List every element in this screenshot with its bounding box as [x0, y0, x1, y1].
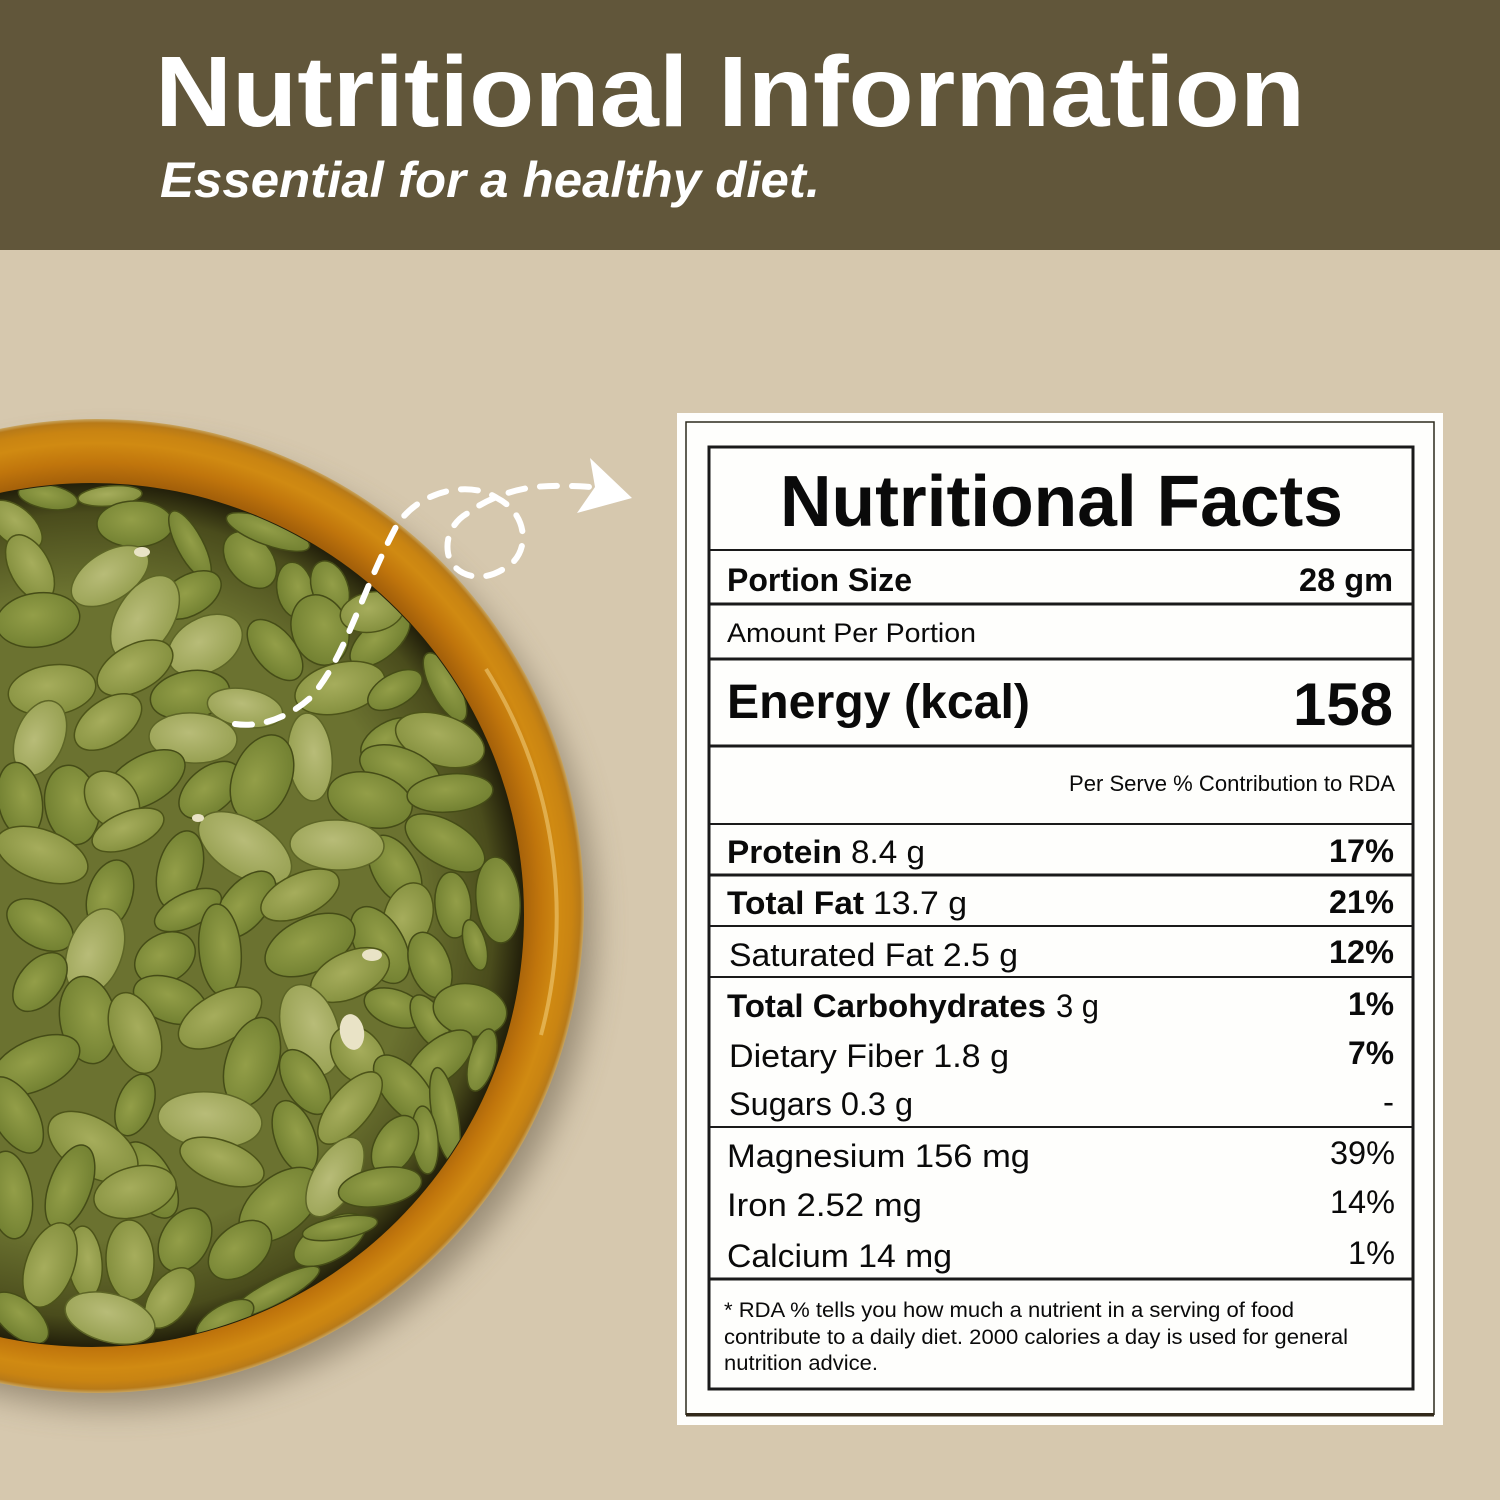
title: Nutritional Information — [155, 36, 1305, 148]
portion size row — [727, 562, 1393, 598]
table heading: Nutritional Facts — [780, 462, 1343, 542]
iron row: 14% — [1330, 1184, 1395, 1220]
sugars row: - — [1383, 1084, 1394, 1120]
nutrition facts card — [677, 413, 1443, 1425]
footnote: contribute to a daily diet. 2000 calories a day is used for general — [724, 1325, 1348, 1349]
footnote: nutrition advice. — [724, 1351, 878, 1375]
amount per portion: Amount Per Portion — [727, 618, 976, 648]
dashed arrow from bowl to label — [235, 458, 632, 725]
footnote: * RDA % tells you how much a nutrient in a serving of food — [724, 1298, 1294, 1322]
footnote — [724, 1298, 1348, 1375]
seeds — [0, 480, 524, 1354]
saturated fat row — [729, 934, 1394, 973]
calcium row — [727, 1235, 1395, 1274]
energy row: 158 — [1293, 671, 1393, 738]
subtitle: Essential for a healthy diet. — [160, 152, 820, 208]
sugars row — [729, 1084, 1394, 1122]
sugars row: Sugars 0.3 g — [729, 1086, 913, 1122]
portion size row: 28 gm — [1299, 562, 1393, 598]
portion size row: Portion Size — [727, 562, 912, 598]
total carbohydrates row: Total Carbohydrates — [727, 988, 1046, 1024]
calcium row: 1% — [1348, 1235, 1395, 1271]
total carbohydrates row: 3 g — [1056, 988, 1099, 1024]
skin chips on seeds — [134, 547, 382, 1052]
total fat row: 13.7 g — [873, 885, 967, 921]
total fat row: Total Fat — [727, 885, 864, 921]
saturated fat row: Saturated Fat 2.5 g — [729, 937, 1018, 973]
bowl of pumpkin seeds — [0, 419, 594, 1407]
facts table — [709, 447, 1413, 1389]
RDA header: Per Serve % Contribution to RDA — [1069, 771, 1395, 796]
calcium row: Calcium 14 mg — [727, 1238, 952, 1274]
bowl rim — [0, 419, 584, 1393]
saturated fat row: 12% — [1329, 934, 1394, 970]
energy row — [727, 671, 1393, 738]
magnesium row: 39% — [1330, 1135, 1395, 1171]
total carbohydrates row — [727, 986, 1394, 1024]
protein row — [727, 833, 1394, 870]
header banner — [0, 0, 1500, 250]
protein row: 17% — [1329, 833, 1394, 869]
dietary fiber row: 7% — [1348, 1035, 1394, 1071]
magnesium row — [727, 1135, 1395, 1174]
protein row: Protein — [727, 834, 842, 870]
iron row — [727, 1184, 1395, 1223]
total fat row — [727, 884, 1394, 921]
dietary fiber row: Dietary Fiber 1.8 g — [729, 1038, 1009, 1074]
protein row: 8.4 g — [851, 834, 925, 870]
magnesium row: Magnesium 156 mg — [727, 1138, 1030, 1174]
arrowhead — [577, 458, 632, 513]
iron row: Iron 2.52 mg — [727, 1187, 922, 1223]
total fat row: 21% — [1329, 884, 1394, 920]
dietary fiber row — [729, 1035, 1394, 1074]
energy row: Energy (kcal) — [727, 676, 1030, 729]
total carbohydrates row: 1% — [1348, 986, 1394, 1022]
card inner border — [686, 422, 1434, 1415]
